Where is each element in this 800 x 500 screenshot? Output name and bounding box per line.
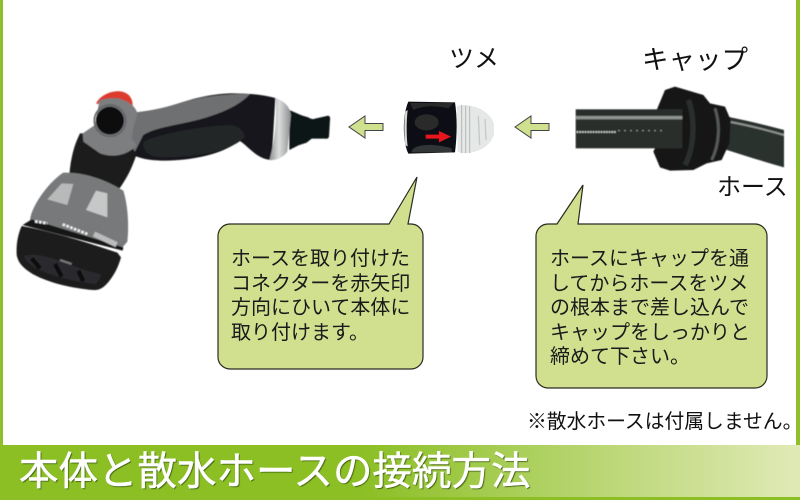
label band — [23, 219, 123, 251]
callout text: 方向にひいて本体に — [231, 297, 410, 319]
spray head dome — [30, 173, 128, 248]
product photo: spray nozzle — [16, 90, 331, 291]
callout shape — [217, 176, 424, 370]
handle grip sheen — [143, 125, 245, 157]
handle body — [135, 93, 275, 161]
gray pivot ring — [83, 98, 137, 156]
product photo: connector with red arrow — [404, 102, 494, 154]
callout shape — [535, 184, 768, 389]
nozzle face openings — [24, 255, 102, 284]
callout text: 取り付けます。 — [231, 322, 369, 344]
title banner — [0, 445, 800, 500]
callout text: の根本まで差し込んで — [550, 297, 749, 319]
callout: insert hose instructions — [535, 184, 768, 389]
silver collar — [269, 98, 291, 160]
hose tail — [725, 117, 784, 167]
pivot hole — [96, 107, 124, 135]
callout text: ホースを取り付けた — [231, 248, 410, 270]
label: cap: キャップ — [642, 45, 748, 75]
white collet — [457, 105, 495, 153]
cap nut — [653, 87, 731, 171]
neck — [69, 133, 138, 190]
callout text: コネクターを赤矢印 — [231, 272, 410, 294]
arrow: connector to nozzle — [348, 115, 384, 139]
handle top strip — [128, 94, 250, 152]
hose front — [576, 109, 682, 148]
callout text — [231, 248, 410, 344]
callout: pull connector instructions — [217, 176, 424, 370]
red direction arrow — [426, 131, 451, 142]
band markings — [35, 221, 87, 234]
red dial — [96, 91, 133, 107]
title: 本体と散水ホースの接続方法 — [19, 450, 531, 494]
nozzle face ring — [17, 226, 121, 290]
label: tsume: ツメ — [449, 45, 499, 73]
footnote: ※散水ホースは付属しません。 — [527, 411, 800, 433]
callout text: キャップをしっかりと — [550, 322, 750, 344]
callout text: してからホースをツメ — [550, 272, 748, 294]
arrow: hose to connector — [514, 115, 550, 139]
callout text — [550, 248, 750, 368]
label: hose: ホース — [717, 174, 788, 201]
dome windows — [47, 183, 73, 205]
nozzle connector — [289, 110, 330, 150]
callout text: ホースにキャップを通 — [550, 248, 749, 270]
callout text: 締めて下さい。 — [550, 346, 690, 368]
black connector body — [404, 102, 457, 154]
product photo: hose with cap — [575, 86, 785, 172]
